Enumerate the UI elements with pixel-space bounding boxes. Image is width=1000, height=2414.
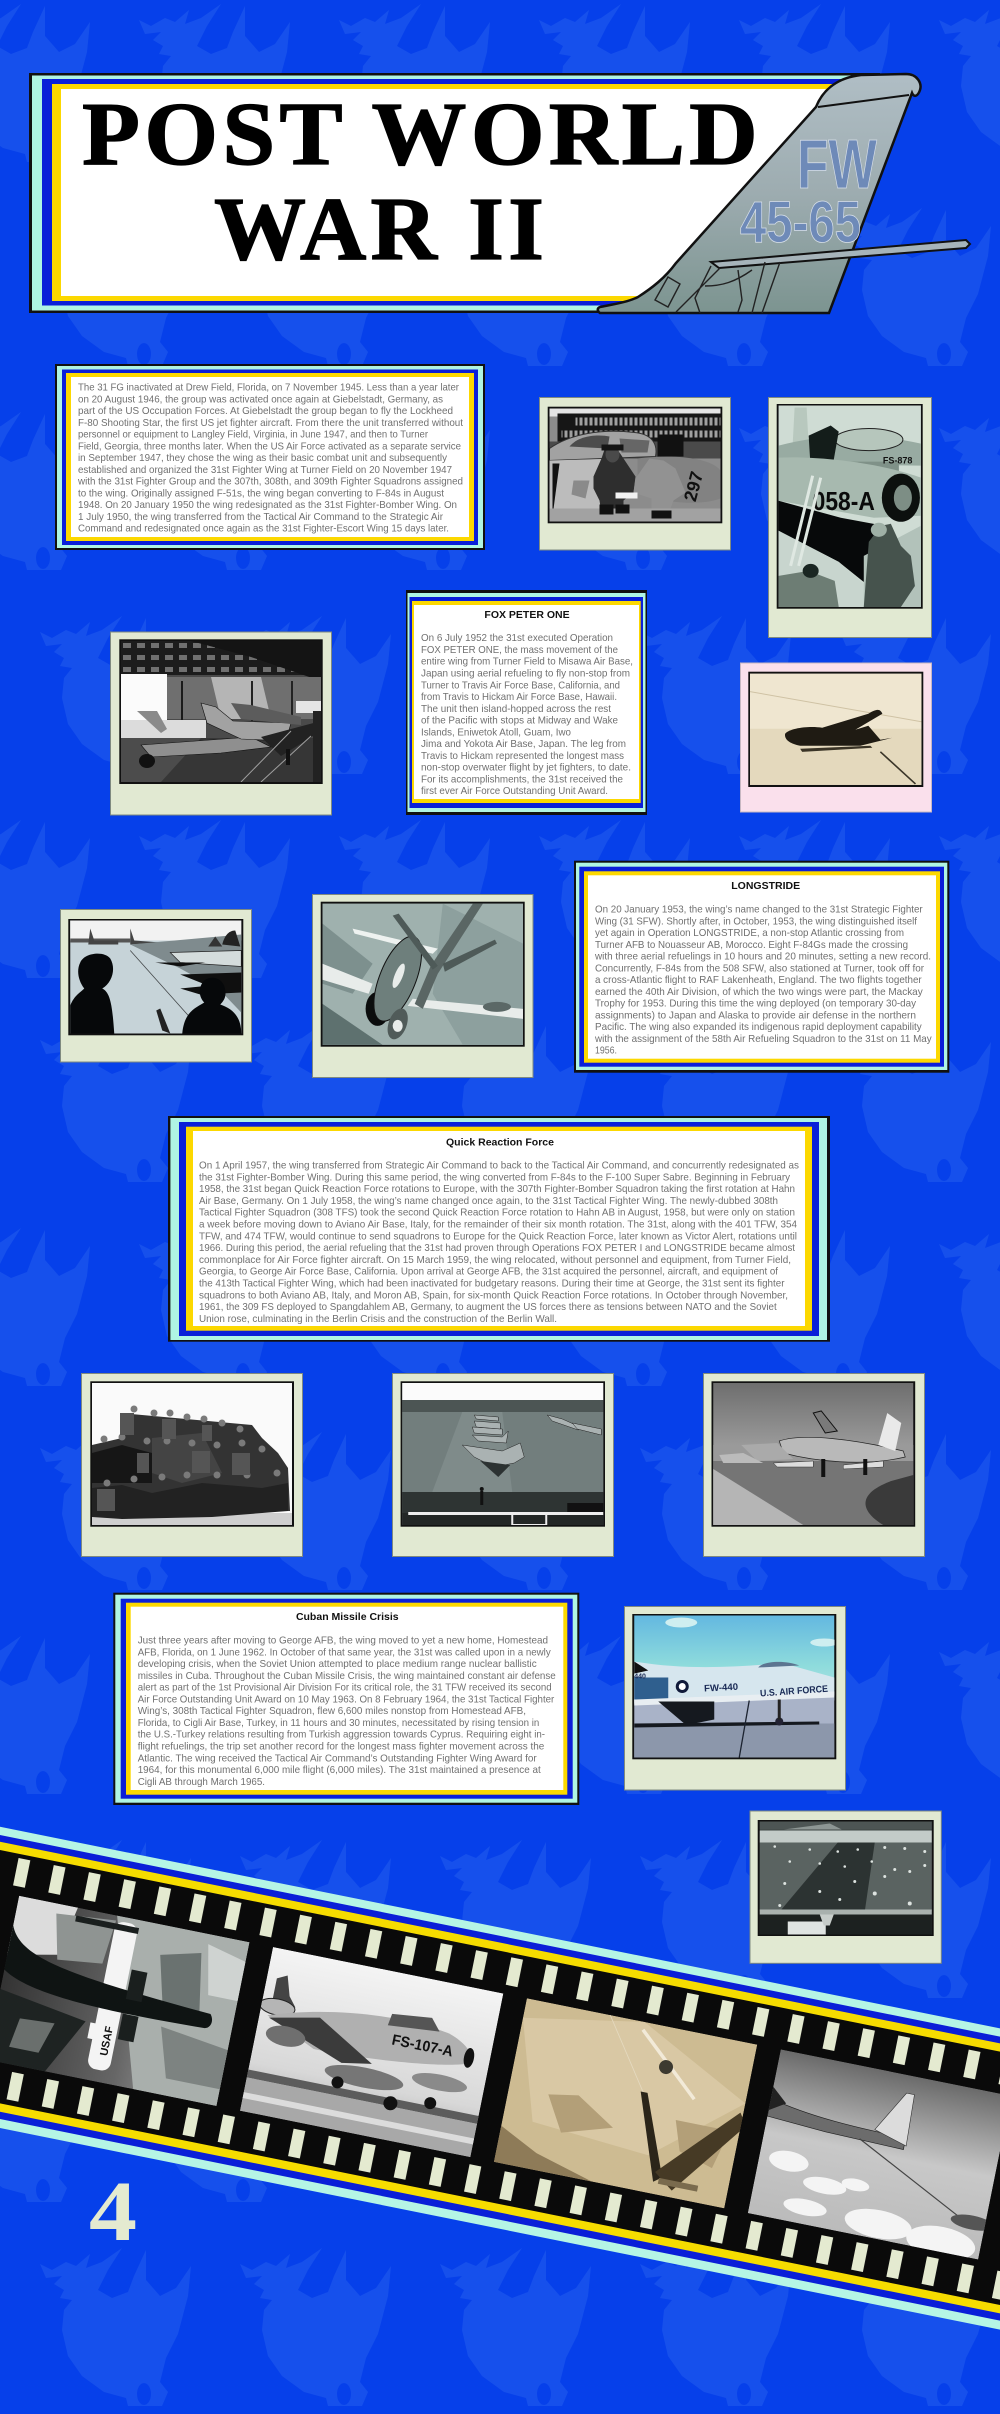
Cuban Missile Crisis paragraph: AFB, Florida, on 1 June 1962. In October of that same year, the 31st was called upon in a newly [138, 1647, 551, 1658]
panel: introduction text [55, 364, 485, 550]
LONGSTRIDE paragraph: with the assignment of the 58th Air Refueling Squadron to the 31st on 11 May [594, 1034, 932, 1045]
FOX PETER ONE paragraph: Jima and Yokota Air Base, Japan. The leg from [421, 739, 626, 750]
photo card: officers crouching by jet [540, 398, 730, 550]
LONGSTRIDE paragraph: earned the 40th Air Division, of which the two wings were part, the Mackay [595, 987, 923, 998]
photo card: squadron group portrait [82, 1374, 302, 1556]
Quick Reaction Force paragraph: Tactical Fighter Squadron (308 TFS) took the second Quick Reaction Force rotation to Hahn AB in August, 1958, but were only on station [199, 1208, 795, 1219]
Quick Reaction Force paragraph: squadrons to both Aviano AB, Italy, and Moron AB, Spain, for six-month Quick Reaction Force rotations. In October through November, [199, 1290, 788, 1301]
FOX PETER ONE paragraph: Islands, Eniwetok Atoll, Guam, Iwo [421, 727, 571, 738]
photo card: F-100 FW-440 in color: 440 [634, 1674, 646, 1680]
filmstrip with four historic aircraft photos [0, 1817, 1000, 2403]
LONGSTRIDE paragraph [594, 904, 932, 1056]
heading: LONGSTRIDE: LONGSTRIDE [731, 880, 800, 892]
photo card: F-84 being serviced [768, 398, 932, 638]
film frame 2: F-84 landing [240, 1947, 504, 2157]
film frame 1: bomber from above: USAF [98, 2025, 116, 2057]
LONGSTRIDE paragraph: 1956. [595, 1046, 617, 1056]
LONGSTRIDE paragraph: Wing (31 SFW). Shortly after, in October, 1953, the wing distinguished itself [595, 916, 917, 927]
FOX PETER ONE paragraph: Turner to Travis Air Force Base, California, and [421, 680, 620, 691]
Cuban Missile Crisis paragraph: Wing’s, 308th Tactical Fighter Squadron, flew 6,600 miles nonstop from Homestead AFB, [138, 1706, 526, 1717]
introduction paragraph: The 31 FG inactivated at Drew Field, Florida, on 7 November 1945. Less than a year later [78, 382, 459, 394]
introduction paragraph: personnel or equipment to Langley Field, Virginia, in June 1947, and then to Turner [78, 430, 428, 440]
title text: POST WORLD [82, 85, 762, 184]
Quick Reaction Force paragraph: Air Base, Germany. On 1 July 1958, the wing’s name changed once again, to the 31st Tactical Fighter Wing. The newly-dubbed 308th [199, 1196, 778, 1207]
fin text FW: FW [797, 125, 877, 203]
film sprocket holes [0, 1844, 1000, 2374]
LONGSTRIDE paragraph: a cross-Atlantic flight to RAF Lakenheath, England. The two flights together [595, 975, 922, 986]
icon: aircraft tail fin [598, 74, 970, 313]
panel: FOX PETER ONE [406, 590, 647, 815]
LONGSTRIDE paragraph: Concurrently, F-84s from the 508 SFW, also stationed at Turner, took off for [595, 963, 925, 974]
Quick Reaction Force paragraph: the 413th Tactical Fighter Wing, which had been inactivated for budgetary reasons. During their time at George, the 31st sent its fighter [199, 1278, 785, 1290]
page number: 4 [89, 2163, 137, 2259]
Cuban Missile Crisis paragraph [138, 1636, 556, 1788]
LONGSTRIDE paragraph: On 20 January 1953, the wing’s name changed to the 31st Strategic Fighter [595, 904, 923, 916]
Cuban Missile Crisis paragraph: Air Force Outstanding Unit Award on 10 May 1963. On 8 February 1964, the 31st Tactical Fighter [138, 1694, 555, 1705]
introduction paragraph: with the 31st Fighter Group and the 307th, 308th, and 309th Fighter Squadrons assigned [77, 476, 463, 488]
film frame 3: aerial refueling in sepia [494, 1998, 758, 2208]
introduction paragraph: part of the US Occupation Forces. At Giebelstadt the group began to fly the Lockheed [78, 406, 453, 417]
photo card: F-100 with open canopy [704, 1374, 924, 1556]
Quick Reaction Force paragraph: 1958, the 31st began Quick Reaction Force rotations to Europe, with the 307th Fighter-Bomber Squadron taking the first rotation at Hahn [199, 1184, 795, 1195]
Quick Reaction Force paragraph: a week before moving down to Aviano Air Base, Italy, for the remainder of their six month rotation. The 31st, along with the 401 TFW, 354 [199, 1220, 797, 1230]
LONGSTRIDE paragraph: assignments) to Japan and Alaska to provide air defense in the northern [595, 1010, 916, 1021]
panel: Quick Reaction Force [168, 1116, 830, 1342]
Quick Reaction Force paragraph [199, 1160, 799, 1325]
photo card: bomber refueling in sepia [740, 663, 932, 812]
FOX PETER ONE paragraph: Travis to Hickam represented the longest mass [421, 751, 624, 762]
fin text 45-65: 45-65 [740, 190, 861, 255]
Quick Reaction Force paragraph: Union rose, culminating in the Berlin Crisis and the construction of the Berlin Wall. [199, 1314, 557, 1325]
Quick Reaction Force paragraph: Georgia, to George Air Force Base, California. Upon arrival at George AFB, the 31st acquired the personnel, aircraft, and equipment of [199, 1267, 778, 1278]
Cuban Missile Crisis paragraph: missiles in Cuba. Throughout the Cuban Missile Crisis, the wing maintained constant air defense [138, 1671, 556, 1682]
Cuban Missile Crisis paragraph: alert as part of the 1st Provisional Air Division For its critical role, the 31 TFW received its second [138, 1683, 552, 1694]
photo card: F-100s on ramp [392, 1374, 614, 1556]
Quick Reaction Force paragraph: 1966. During this period, the aerial refueling that the 31st had proven through Operations FOX PETER I and LONGSTRIDE became almost [199, 1243, 795, 1254]
film frame 4: bomber refueling over clouds [748, 2050, 1000, 2260]
introduction paragraph: Field, Georgia, three months later. When the US Air Force activated as a separate service [78, 441, 461, 452]
Quick Reaction Force paragraph: TFW, and 474 TFW, would continue to send squadrons to Europe for the Quick Reaction Force, later known as Victor Alert, rotations until [199, 1231, 797, 1242]
Cuban Missile Crisis paragraph: Cigli AB through March 1965. [138, 1777, 265, 1788]
introduction paragraph: F-80 Shooting Star, the first US jet fighter aircraft. From there the unit transferred without [78, 418, 463, 429]
heading: FOX PETER ONE: FOX PETER ONE [484, 609, 570, 621]
Quick Reaction Force paragraph: commonplace for Air Force fighter aircraft. On 15 March 1959, the wing relocated, without personnel and equipment, from Turner Field, [199, 1255, 791, 1266]
heading: Cuban Missile Crisis: Cuban Missile Crisis [296, 1611, 399, 1623]
photo card: jets in hangar [110, 632, 332, 815]
Quick Reaction Force paragraph: On 1 April 1957, the wing transferred from Strategic Air Command to back to the Tactical Air Command, and concurrently redesignated as [199, 1160, 799, 1172]
FOX PETER ONE paragraph: For its accomplishments, the 31st received the [421, 774, 623, 785]
photo card: aerial view of airfield [750, 1811, 941, 1963]
FOX PETER ONE paragraph: of the Pacific with stops at Midway and Wake [421, 716, 618, 727]
Cuban Missile Crisis paragraph: Atlantic. The wing received the Tactical Air Command’s Outstanding Fighter Wing Award for [138, 1753, 537, 1764]
title banner [29, 73, 970, 313]
Cuban Missile Crisis paragraph: flight refuelings, the trip set another record for the longest mass fighter movement across the [138, 1742, 545, 1752]
LONGSTRIDE paragraph: Pacific. The wing also expanded its indigenous rapid deployment capability [595, 1022, 922, 1033]
photo card: officers crouching by jet: 297 [680, 469, 707, 504]
Cuban Missile Crisis paragraph: 1964, for this monumental 6,000 mile flight (6,000 miles). The 31st maintained a presence at [138, 1765, 541, 1776]
panel: LONGSTRIDE [574, 861, 949, 1073]
photo card: F-100 FW-440 in color [624, 1606, 846, 1790]
LONGSTRIDE paragraph: Turner AFB to Nouasseur AB, Morocco. Eight F-84Gs made the crossing [595, 940, 908, 951]
title text: WAR II [214, 180, 548, 279]
heading: Quick Reaction Force: Quick Reaction Force [446, 1136, 554, 1148]
film frame 2: F-84 landing: FS-107-A [390, 2032, 455, 2060]
introduction paragraph: on 20 August 1946, the group was activated once again at Giebelstadt, Germany, as [78, 394, 443, 405]
Cuban Missile Crisis paragraph: the U.S.-Turkey relations resulting from Turkish aggression towards Cyprus. Requiring eight in- [138, 1730, 545, 1741]
panel: Cuban Missile Crisis [113, 1593, 579, 1805]
introduction paragraph: 1 July 1950, the wing transferred from the Tactical Air Command to the Strategic Air [78, 512, 444, 523]
title text [82, 85, 762, 279]
introduction paragraph [77, 382, 463, 534]
FOX PETER ONE paragraph: On 6 July 1952 the 31st executed Operation [421, 633, 613, 644]
LONGSTRIDE paragraph: Trophy for 1953. During this time the wing deployed (on temporary 30-day [595, 998, 917, 1010]
Quick Reaction Force paragraph: the 31st Fighter-Bomber Wing. During this same period, the wing converted from F-84s to the F-100 Super Sabre. Beginning in February [199, 1172, 791, 1183]
photo card: F-84 being serviced: 058-A [813, 486, 875, 516]
FOX PETER ONE paragraph: from Travis to Hickam Air Force Base, Hawaii. [421, 692, 617, 703]
Cuban Missile Crisis paragraph: Just three years after moving to George AFB, the wing moved to yet a new home, Homestead [138, 1636, 548, 1646]
FOX PETER ONE paragraph: FOX PETER ONE, the mass movement of the [421, 645, 618, 656]
FOX PETER ONE paragraph: entire wing from Turner Field to Misawa Air Base, [421, 657, 633, 668]
FOX PETER ONE paragraph: first ever Air Force Outstanding Unit Award. [421, 786, 608, 797]
Cuban Missile Crisis paragraph: Florida, to Cigli Air Base, Turkey, in 11 hours and 30 minutes, necessitated by rising tension in [138, 1718, 540, 1729]
introduction paragraph: Command and redesignated once again as the 31st Fighter-Escort Wing 15 days later. [78, 524, 449, 534]
introduction paragraph: to the wing. Originally assigned F-51s, the wing began converting to F-84s in August [78, 488, 444, 499]
LONGSTRIDE paragraph: with three aerial refuelings in 10 hours and 20 minutes, setting a new record. [594, 952, 931, 962]
aircraft markings: FW-440 [704, 1682, 738, 1694]
FOX PETER ONE paragraph: non-stop overwater flight by jet fighters, to date. [421, 763, 631, 774]
photo card: F-100 FW-440 in color: U.S. AIR FORCE [760, 1684, 828, 1699]
film frame 1: bomber from above [0, 1896, 250, 2106]
photo card: F-84 being serviced: FS-878 [883, 456, 912, 466]
introduction paragraph: in September 1947, they chose the wing as their basic combat unit and subsequently [78, 453, 448, 464]
Quick Reaction Force paragraph: 1961, the 309 FS deployed to Spangdahlem AB, Germany, to augment the US forces there as tensions between NATO and the Soviet [199, 1302, 777, 1313]
introduction paragraph: 1948. On 20 January 1950 the wing redesignated as the 31st Fighter-Bomber Wing. On [78, 500, 457, 511]
Cuban Missile Crisis paragraph: developing crisis, when the Soviet Union attempted to place medium range nuclear ballistic [138, 1659, 537, 1670]
FOX PETER ONE paragraph: The unit then island-hopped across the rest [421, 704, 611, 715]
FOX PETER ONE paragraph: Japan using aerial refueling to fly non-stop from [421, 668, 630, 680]
FOX PETER ONE paragraph [421, 633, 633, 797]
LONGSTRIDE paragraph: yet again in Operation LONGSTRIDE, a non-stop Atlantic crossing from [595, 928, 904, 939]
introduction paragraph: established and organized the 31st Fighter Wing at Turner Field on 20 November 1947 [78, 465, 452, 476]
photo card: flight line with silhouettes [60, 910, 252, 1062]
photo card: F-84 refueling from boom [312, 894, 533, 1078]
